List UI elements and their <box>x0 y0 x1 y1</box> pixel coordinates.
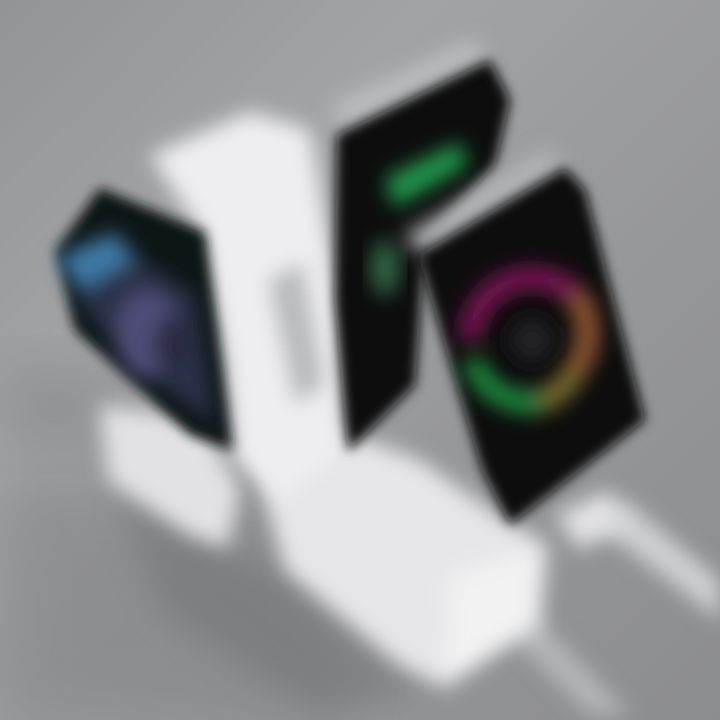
middle device top edge <box>332 40 490 130</box>
left device <box>56 188 232 450</box>
body grey strip <box>268 262 325 405</box>
middle device green bar <box>385 142 468 208</box>
lower left white block <box>100 405 240 548</box>
middle device green glow <box>371 240 399 296</box>
activity ring <box>470 278 588 403</box>
cables <box>505 500 720 715</box>
cast shadow under dock <box>120 500 420 715</box>
right device top edge <box>405 150 565 255</box>
right device <box>405 150 645 525</box>
white dock base <box>255 420 625 688</box>
left device screen <box>56 232 215 425</box>
ring centre <box>510 318 554 362</box>
white dock upright body <box>150 112 345 500</box>
middle device <box>332 40 510 452</box>
